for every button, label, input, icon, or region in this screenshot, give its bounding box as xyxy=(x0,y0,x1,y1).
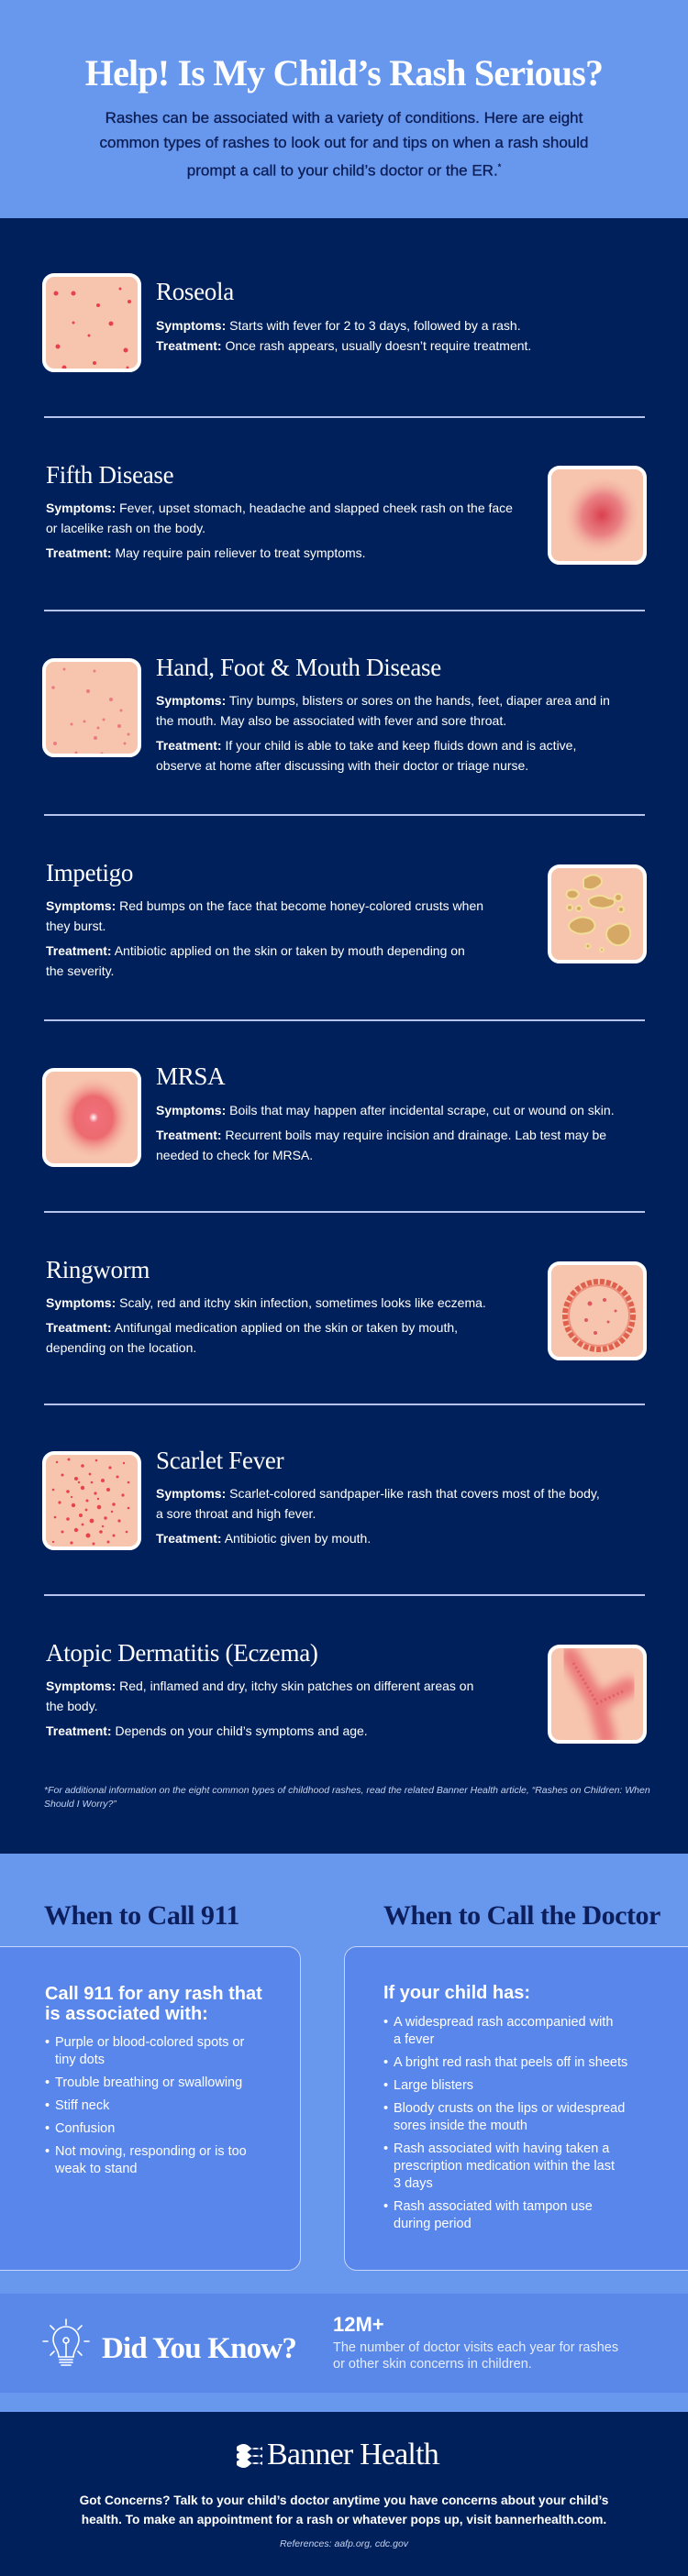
list xyxy=(46,2035,247,2176)
box heading: Call 911 for any rash that xyxy=(45,1984,262,2004)
footer xyxy=(0,2412,688,2576)
list: Confusion xyxy=(55,2121,115,2136)
list: A widespread rash accompanied with xyxy=(394,2015,613,2030)
panel: Atopic Dermatitis xyxy=(46,1639,647,1744)
logo: Banner Health: Banner Health. xyxy=(267,2438,439,2471)
closing text: health. To make an appointment for a rash or whatever pops up, visit bannerhealth.com. xyxy=(82,2513,606,2526)
list: Rash associated with tampon use xyxy=(394,2199,593,2214)
panel: Ringworm xyxy=(46,1256,647,1360)
closing text xyxy=(80,2493,608,2526)
text: Treatment: May require pain reliever to treat symptoms. xyxy=(46,545,366,560)
footnote xyxy=(44,1785,650,1810)
icon: banner waves xyxy=(237,2444,262,2468)
subtitle: common types of rashes to look out for and tips on when a rash should xyxy=(100,134,588,151)
box heading: If your child has: xyxy=(383,1983,530,2003)
heading: did you know: Did You Know? xyxy=(102,2332,296,2365)
list: tiny dots xyxy=(55,2053,105,2067)
panel: Roseola xyxy=(42,273,531,372)
text: the severity. xyxy=(46,963,114,978)
heading: Impetigo xyxy=(46,859,133,886)
text: depending on the location. xyxy=(46,1340,196,1355)
text: Symptoms: Fever, upset stomach, headache and slapped cheek rash on the face xyxy=(46,501,513,515)
stat text: The number of doctor visits each year for rashes xyxy=(333,2340,618,2355)
subtitle: Rashes can be associated with a variety of conditions. Here are eight xyxy=(105,109,583,127)
icon: scarlet fever rash xyxy=(42,1451,141,1550)
text: Treatment: If your child is able to take and keep fluids down and is active, xyxy=(156,738,576,753)
panel: MRSA xyxy=(42,1062,615,1167)
text: Symptoms: Red bumps on the face that become honey-colored crusts when xyxy=(46,898,483,913)
subtitle xyxy=(100,109,588,180)
panel: when to call xyxy=(0,1854,688,2412)
text: they burst. xyxy=(46,919,105,933)
stat text xyxy=(333,2340,618,2372)
text xyxy=(46,898,483,978)
stat text: or other skin concerns in children. xyxy=(333,2357,532,2372)
heading: Ringworm xyxy=(46,1256,150,1283)
box heading: is associated with: xyxy=(45,2004,208,2024)
stat: 12M+: 12M+ xyxy=(333,2313,384,2336)
text xyxy=(46,1295,486,1355)
list: A bright red rash that peels off in sheets xyxy=(394,2055,627,2070)
icon: fifth disease rash xyxy=(548,466,647,565)
text: Symptoms: Boils that may happen after incidental scrape, cut or wound on skin. xyxy=(156,1103,615,1117)
text xyxy=(46,501,513,560)
heading: when to call the doctor: When to Call the Doctor xyxy=(383,1900,660,1931)
panel: Impetigo xyxy=(46,859,647,978)
text: the mouth. May also be associated with fever and sore throat. xyxy=(156,713,506,728)
box: call 911 xyxy=(0,1946,301,2271)
list: Large blisters xyxy=(394,2078,473,2093)
icon: MRSA boil xyxy=(42,1068,141,1167)
panel: Hand, Foot & Mouth xyxy=(42,654,610,773)
panel: Scarlet Fever xyxy=(42,1447,600,1550)
heading: Fifth Disease xyxy=(46,461,173,489)
references: References: aafp.org, cdc.gov xyxy=(280,2538,408,2549)
text: Treatment: Antibiotic given by mouth. xyxy=(156,1531,371,1546)
list: Rash associated with having taken a xyxy=(394,2141,609,2156)
text: Symptoms: Red, inflamed and dry, itchy skin patches on different areas on xyxy=(46,1679,473,1693)
heading: Roseola xyxy=(156,278,234,305)
panel: Fifth Disease xyxy=(46,461,647,565)
heading: when to call 911: When to Call 911 xyxy=(44,1900,239,1931)
closing text: Got Concerns? Talk to your child’s doctor anytime you have concerns about your child’s xyxy=(80,2493,608,2507)
icon: light bulb xyxy=(42,2318,90,2366)
list: 3 days xyxy=(394,2176,433,2191)
icon: eczema xyxy=(548,1645,647,1744)
heading: MRSA xyxy=(156,1062,225,1090)
icon: HFM rash xyxy=(42,658,141,757)
text: Treatment: Recurrent boils may require incision and drainage. Lab test may be xyxy=(156,1128,606,1142)
list: Bloody crusts on the lips or widespread xyxy=(394,2101,625,2116)
text: or lacelike rash on the body. xyxy=(46,521,205,535)
text: Treatment: Depends on your child’s symptoms and age. xyxy=(46,1723,368,1738)
footnote: Should I Worry?” xyxy=(44,1799,117,1810)
icon: ringworm xyxy=(548,1261,647,1360)
list: a fever xyxy=(394,2032,434,2047)
list: Stiff neck xyxy=(55,2098,109,2113)
subtitle: prompt a call to your child’s doctor or the ER.* xyxy=(187,162,501,180)
text: Symptoms: Scarlet-colored sandpaper-like rash that covers most of the body, xyxy=(156,1486,600,1501)
header band xyxy=(0,0,688,218)
panel: did you know xyxy=(0,2294,688,2393)
title: Help! Is My Child’s Rash Serious? xyxy=(85,52,603,94)
icon: impetigo rash xyxy=(548,864,647,963)
list: Not moving, responding or is too xyxy=(55,2144,247,2159)
text: Treatment: Antifungal medication applied on the skin or taken by mouth, xyxy=(46,1320,458,1335)
list: Purple or blood-colored spots or xyxy=(55,2035,244,2050)
list: Trouble breathing or swallowing xyxy=(55,2075,242,2090)
heading: Hand, Foot & Mouth Disease xyxy=(156,654,441,681)
text: Symptoms: Tiny bumps, blisters or sores on the hands, feet, diaper area and in xyxy=(156,693,610,708)
text xyxy=(156,1103,615,1162)
text: Symptoms: Scaly, red and itchy skin infection, sometimes looks like eczema. xyxy=(46,1295,486,1310)
box heading xyxy=(45,1984,262,2024)
list xyxy=(383,2015,627,2231)
text xyxy=(46,1679,473,1738)
text: Treatment: Antibiotic applied on the skin or taken by mouth depending on xyxy=(46,943,465,958)
text: the body. xyxy=(46,1699,98,1713)
list: sores inside the mouth xyxy=(394,2119,527,2133)
heading: Scarlet Fever xyxy=(156,1447,283,1474)
text: a sore throat and high fever. xyxy=(156,1506,316,1521)
footnote: *For additional information on the eight common types of childhood rashes, read the related Banner Health article, “Rashes on Children: When xyxy=(44,1785,650,1796)
text: needed to check for MRSA. xyxy=(156,1148,313,1162)
icon: roseola rash xyxy=(42,273,141,372)
list: prescription medication within the last xyxy=(394,2159,615,2174)
text xyxy=(156,318,531,353)
text: observe at home after discussing with their doctor or triage nurse. xyxy=(156,758,528,773)
text xyxy=(156,693,610,773)
box: call doctor xyxy=(344,1946,688,2271)
text: Symptoms: Starts with fever for 2 to 3 days, followed by a rash. xyxy=(156,318,521,333)
text xyxy=(156,1486,600,1546)
list: during period xyxy=(394,2217,472,2231)
text: Treatment: Once rash appears, usually doesn’t require treatment. xyxy=(156,338,531,353)
heading: Atopic Dermatitis (Eczema) xyxy=(46,1639,318,1667)
list: weak to stand xyxy=(55,2162,137,2176)
